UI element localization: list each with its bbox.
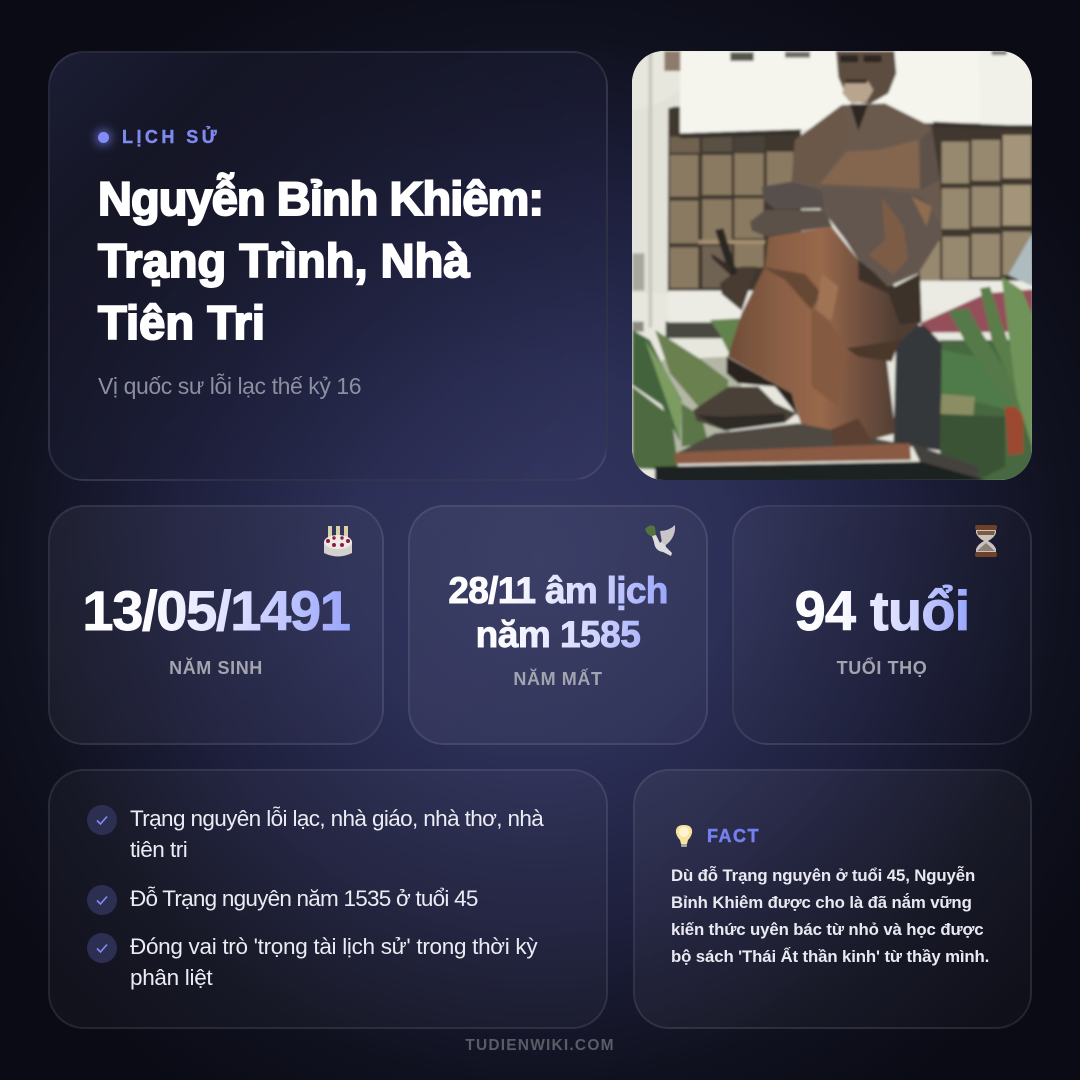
panel: fact xyxy=(633,769,1032,1029)
item text: phân liệt xyxy=(130,965,212,990)
fact text: Dù đỗ Trạng nguyên ở tuổi 45, Nguyễn xyxy=(671,866,975,885)
icon: light bulb xyxy=(676,825,692,847)
back hand and scroll xyxy=(720,267,757,311)
hands and book xyxy=(762,182,825,209)
stat value: 13/05/1491 xyxy=(82,579,350,642)
item text: Đỗ Trạng nguyên năm 1535 ở tuổi 45 xyxy=(130,886,478,911)
fact text: Bỉnh Khiêm được cho là đã nắm vững xyxy=(671,893,972,912)
stat label: NĂM SINH xyxy=(169,658,263,678)
stat label: TUỔI THỌ xyxy=(837,658,927,678)
stat value xyxy=(448,570,668,655)
main heading xyxy=(98,172,543,349)
icon: birthday cake xyxy=(324,526,352,556)
icon: hourglass xyxy=(975,525,997,557)
icon: check xyxy=(87,885,117,915)
stat value: 28/11 âm lịch xyxy=(448,570,668,611)
stat card: death xyxy=(408,505,708,745)
stat card: birth xyxy=(48,505,384,745)
main heading: Nguyễn Bỉnh Khiêm: xyxy=(98,172,543,225)
left building details xyxy=(632,90,680,293)
list item 3 xyxy=(87,933,538,990)
icon: check xyxy=(87,933,117,963)
fact header xyxy=(676,825,760,847)
sleeve xyxy=(822,187,942,283)
panel: title card xyxy=(48,51,608,481)
fact text: kiến thức uyên bác từ nhỏ và học được xyxy=(671,920,984,939)
item text: Trạng nguyên lỗi lạc, nhà giáo, nhà thơ, nhà xyxy=(130,806,543,831)
list item 1 xyxy=(87,805,544,862)
stat card: lifespan xyxy=(732,505,1032,745)
head xyxy=(836,51,896,104)
upper white facade xyxy=(680,51,980,133)
stone seat xyxy=(893,323,942,451)
category label: LỊCH SỬ xyxy=(122,127,220,147)
feet and base xyxy=(727,357,798,417)
panel: key points xyxy=(48,769,608,1029)
icon: dove xyxy=(645,525,676,556)
item text xyxy=(130,934,538,990)
lower robe xyxy=(728,227,922,444)
left window wall xyxy=(668,107,801,292)
left foliage xyxy=(662,357,742,453)
item text: Đóng vai trò 'trọng tài lịch sử' trong thời kỳ xyxy=(130,934,537,959)
stat value: 94 tuổi xyxy=(795,579,969,642)
subtitle: Vị quốc sư lỗi lạc thế kỷ 16 xyxy=(98,373,361,399)
right window wall xyxy=(918,123,1035,283)
right lower building xyxy=(920,281,1033,311)
right foliage xyxy=(940,340,1033,482)
icon: glowing dot xyxy=(98,132,109,143)
main heading: Tiên Tri xyxy=(98,296,265,349)
icon: check xyxy=(87,805,117,835)
category tag xyxy=(90,124,220,151)
photo: statue of Nguyễn Bỉnh Khiêm xyxy=(632,51,1032,480)
stat label: NĂM MẤT xyxy=(513,669,603,689)
fact text: bộ sách 'Thái Ất thần kinh' từ thầy mình. xyxy=(671,947,989,966)
torso xyxy=(792,103,942,287)
item text: tiên tri xyxy=(130,837,187,862)
fact text xyxy=(671,866,989,966)
stat value: năm 1585 xyxy=(476,614,640,655)
fact label: FACT xyxy=(707,826,760,846)
footer: watermark: TUDIENWIKI.COM xyxy=(465,1037,615,1054)
item text xyxy=(130,806,544,862)
list item 2 xyxy=(87,885,478,915)
main heading: Trạng Trình, Nhà xyxy=(98,234,470,287)
